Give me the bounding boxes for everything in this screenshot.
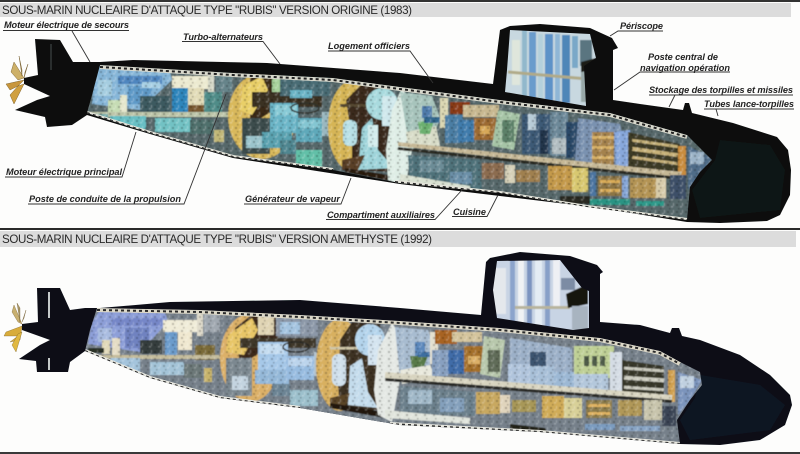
aft lower deck <box>86 355 226 359</box>
hull plating edges <box>87 67 687 220</box>
reactor bulkhead <box>219 316 273 402</box>
forward lower deck <box>408 155 482 190</box>
label: cuisine: Cuisine <box>453 207 486 217</box>
label: turbo-alternateurs <box>182 32 280 64</box>
label: poste central de navigation opération: navigation opération <box>640 63 730 73</box>
submarine: version amethyste 1992 <box>4 252 792 450</box>
heading: version amethyste <box>0 228 800 247</box>
second bulkhead <box>316 321 352 412</box>
hull silhouette <box>19 252 792 445</box>
sail interior <box>505 30 596 106</box>
hull plating edges <box>85 310 680 444</box>
label: moteur électrique principal: Moteur électrique principal <box>6 167 122 177</box>
label: poste de conduite de la propulsion <box>28 94 226 204</box>
heading: version amethyste: SOUS-MARIN NUCLEAIRE D'ATTAQUE TYPE "RUBIS" VERSION AMETHYSTE (1992) <box>2 233 432 246</box>
forward compartment bulkhead <box>386 88 412 188</box>
base tones <box>87 65 712 220</box>
label: compartiment auxiliaires: Compartiment auxiliaires <box>327 210 435 220</box>
label: compartiment auxiliaires <box>326 190 462 220</box>
label: turbo-alternateurs: Turbo-alternateurs <box>183 32 263 42</box>
propeller <box>4 303 26 352</box>
turbine blocks <box>280 74 330 96</box>
hull silhouette <box>15 24 791 223</box>
reactor bulkhead <box>228 73 296 159</box>
label: générateur de vapeur <box>244 178 351 204</box>
heading: version origine: SOUS-MARIN NUCLEAIRE D'ATTAQUE TYPE "RUBIS" VERSION ORIGINE (1983) <box>2 4 412 17</box>
label: stockage des torpilles et missiles: Stockage des torpilles et missiles <box>649 85 793 95</box>
label: logement officiers: Logement officiers <box>328 41 410 51</box>
label: périscope <box>610 21 663 36</box>
label: poste de conduite de la propulsion: Poste de conduite de la propulsion <box>29 194 181 204</box>
label: moteur électrique de secours <box>3 20 129 62</box>
label: logement officiers <box>328 41 433 83</box>
label: générateur de vapeur: Générateur de vapeur <box>245 194 340 204</box>
label: périscope: Périscope <box>620 21 663 31</box>
submarine: version origine 1983 <box>6 24 791 230</box>
label: moteur électrique de secours: Moteur électrique de secours <box>4 20 129 30</box>
aft lower deck <box>85 112 235 117</box>
second bulkhead <box>328 80 362 168</box>
label: moteur électrique principal <box>5 132 136 177</box>
aft machinery <box>88 310 168 352</box>
forward compartment bulkhead <box>374 323 400 422</box>
main deck beam <box>398 142 682 178</box>
bottom border <box>0 452 800 454</box>
label: stockage des torpilles et missiles <box>649 85 793 107</box>
label: poste central de navigation opération <box>614 52 730 90</box>
labels: version origine <box>3 20 794 220</box>
cutaway interior <box>85 308 702 444</box>
cutaway interior <box>87 65 712 220</box>
turbine blocks <box>276 314 318 336</box>
label: poste central de navigation opération: Poste central de <box>648 52 718 62</box>
sail interior <box>493 260 589 330</box>
heading: version origine <box>0 0 800 17</box>
main deck beam <box>385 372 672 400</box>
label: tubes lance-torpilles: Tubes lance-torpilles <box>704 99 794 109</box>
label: tubes lance-torpilles <box>704 99 794 116</box>
forward lower deck <box>400 386 475 416</box>
propeller <box>6 56 28 104</box>
aft machinery <box>92 66 172 110</box>
label: cuisine <box>452 195 498 217</box>
